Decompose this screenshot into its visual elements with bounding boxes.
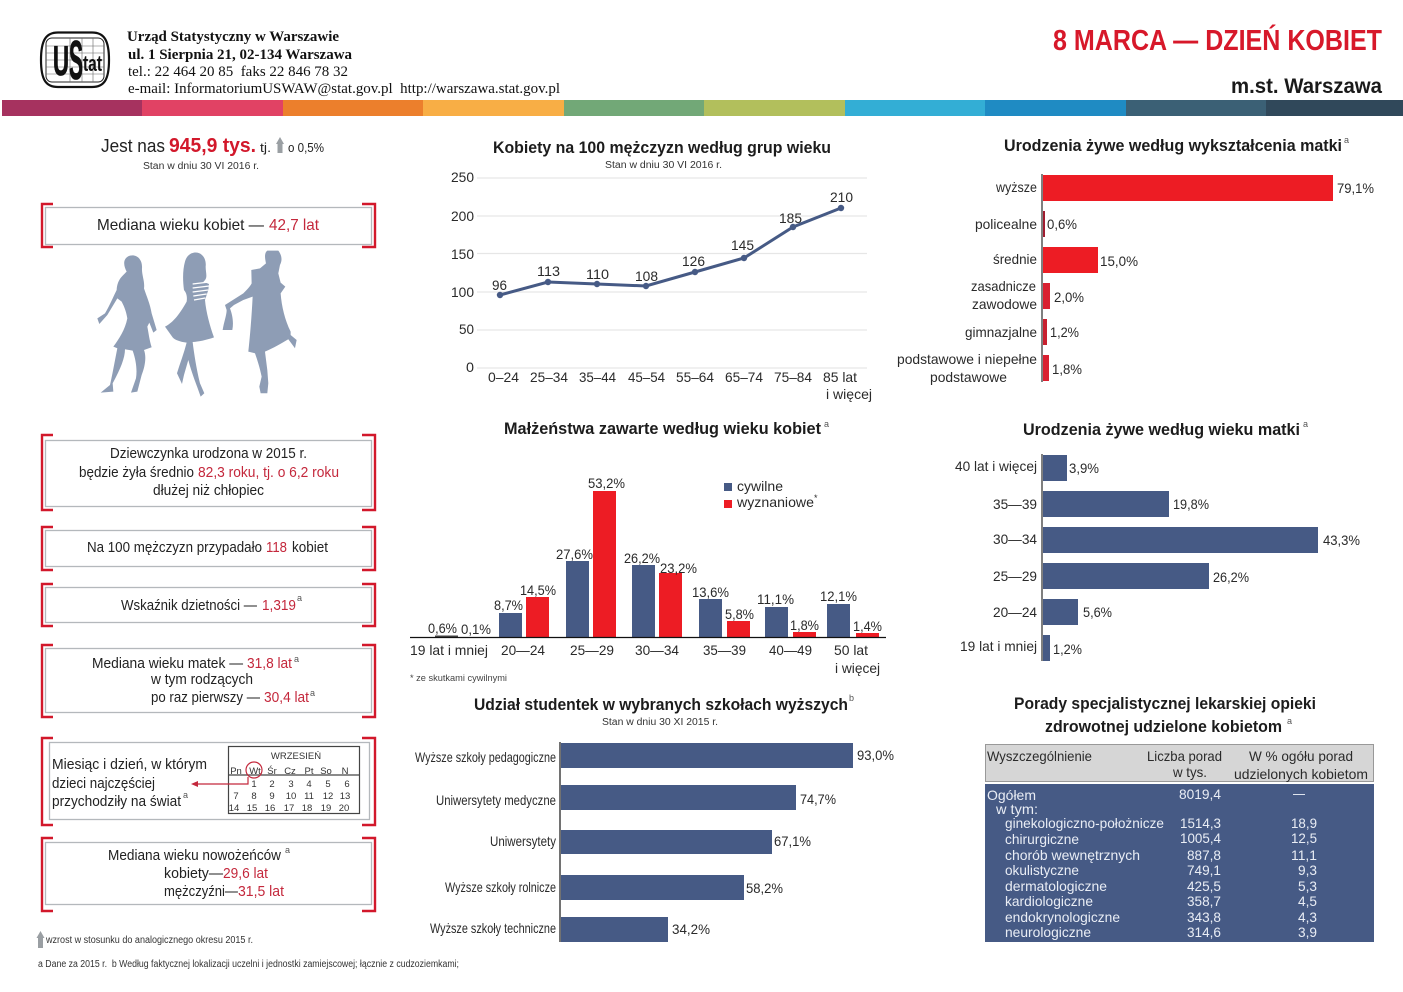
table body: 358,7 — [1187, 893, 1221, 909]
group: 30-34: 23,2% — [660, 560, 697, 576]
group: 40-49: 1,8% — [790, 617, 819, 633]
table body: 3,9 — [1298, 924, 1317, 940]
calendar: September: Pn — [230, 766, 242, 777]
bar chart: births by mother's age — [955, 419, 1360, 661]
bar: wyższe — [995, 175, 1374, 201]
bar: średnie — [993, 247, 1138, 273]
group: 20-24 — [494, 582, 556, 658]
bar: 20-24: 20—24 — [993, 604, 1037, 620]
bar: Wyższe szkoły rolnicze: Wyższe szkoły rolnicze — [445, 879, 556, 895]
panel: median age of newlyweds — [42, 838, 375, 911]
group: 19 lat i mniej: 0,6% — [428, 620, 457, 636]
table body: 8019,4 — [1179, 786, 1221, 802]
panel: fertility rate: a — [297, 593, 302, 603]
panel: population headline: Stan w dniu 30 VI 2016 r. — [143, 161, 259, 172]
institution name and address: tel.: 22 464 20 85 faks 22 846 78 32 — [128, 64, 348, 80]
icon: woman 1 — [97, 255, 157, 393]
panel: median age of mothers: po raz pierwszy — — [151, 690, 260, 706]
legend: wyznaniowe — [736, 494, 814, 510]
line chart: women per 100 men by age group — [451, 138, 872, 402]
panel: median age of mothers: a — [310, 688, 315, 698]
panel: most common birth date: a — [183, 790, 188, 800]
table header: Wyszczególnienie — [987, 748, 1092, 764]
bar: Wyższe szkoły pedagogiczne: Wyższe szkoły pedagogiczne — [415, 749, 556, 765]
chart title: Urodzenia żywe według wieku matki — [1023, 420, 1300, 439]
table body: w tym: — [995, 801, 1038, 817]
panel: population headline — [101, 135, 324, 172]
data labels: 96 — [492, 277, 507, 293]
table body: 9,3 — [1298, 862, 1317, 878]
group: 50 lat i więcej — [820, 588, 882, 676]
group: 50 lat i więcej: i więcej — [835, 660, 880, 676]
table body: 12,5 — [1291, 830, 1317, 846]
bar: zasadnicze zawodowe — [971, 278, 1084, 312]
icon: UStat logo: U — [53, 37, 69, 84]
y axis labels: 0 — [466, 359, 474, 375]
chart title: a — [824, 419, 829, 429]
bar: 35-39: 35—39 — [993, 496, 1037, 512]
group: 40-49: 11,1% — [757, 591, 794, 607]
bar: Wyższe szkoły techniczne: 34,2% — [672, 921, 710, 937]
group: 20-24: 8,7% — [494, 597, 523, 613]
table body: 749,1 — [1187, 862, 1221, 878]
chart subtitle: Stan w dniu 30 VI 2016 r. — [605, 160, 722, 171]
calendar: September — [228, 746, 360, 814]
colour strip — [2, 100, 1403, 116]
panel: life expectancy: dłużej niż chłopiec — [153, 483, 264, 499]
bar: Uniwersytety: Uniwersytety — [490, 833, 556, 849]
institution name and address: ul. 1 Sierpnia 21, 02-134 Warszawa — [128, 47, 353, 63]
table header: udzielonych kobietom — [1234, 766, 1368, 782]
table body: 5,3 — [1298, 878, 1317, 894]
legend: cywilne — [737, 478, 783, 494]
panel: median age of newlyweds: a — [285, 845, 290, 855]
table body: 343,8 — [1187, 909, 1221, 925]
legend: growth arrow — [36, 931, 253, 948]
bar: 20-24 — [993, 599, 1112, 625]
calendar: September: 15 — [247, 803, 257, 814]
table body: 4,5 — [1298, 893, 1317, 909]
table header: Liczba porad — [1147, 748, 1222, 764]
data labels: 210 — [830, 189, 853, 205]
icon: woman 2 — [165, 253, 214, 397]
category labels: 45–54 — [628, 369, 665, 385]
panel: women per 100 men: 118 — [266, 540, 287, 556]
group: 30-34: 26,2% — [624, 550, 660, 566]
table body: 1514,3 — [1180, 815, 1221, 831]
table body: okulistyczne — [1005, 862, 1079, 878]
category labels: 25–34 — [530, 369, 568, 385]
table body: kardiologiczne — [1005, 893, 1093, 909]
bar: 35-39 — [993, 491, 1209, 517]
chart title: b — [849, 693, 854, 703]
bar: Wyższe szkoły rolnicze — [445, 875, 783, 900]
bar: Wyższe szkoły techniczne — [430, 917, 710, 942]
table body: endokrynologiczne — [1005, 909, 1120, 925]
bar: Uniwersytety: 67,1% — [774, 833, 811, 849]
calendar: September: 3 — [288, 779, 294, 790]
bar chart: marriages by age of women — [410, 419, 886, 684]
bar chart: share of female students — [415, 693, 894, 942]
bar chart: births by mother's education — [897, 135, 1374, 385]
group: 25-29: 25—29 — [570, 642, 614, 658]
panel: median age of mothers — [42, 645, 375, 717]
panel: median age of mothers: a — [294, 654, 299, 664]
table header: w tys. — [1172, 764, 1207, 780]
bar: policealne — [975, 211, 1077, 237]
y axis labels: 100 — [451, 284, 474, 300]
bar: Uniwersytety medyczne — [436, 785, 836, 810]
table body: chorób wewnętrznych — [1005, 847, 1140, 863]
panel: most common birth date: przychodziły na świat — [52, 794, 181, 810]
group: 30-34: 30—34 — [635, 642, 679, 658]
calendar: September: 6 — [344, 779, 350, 790]
calendar: September: 10 — [286, 791, 296, 802]
calendar: September: 9 — [269, 791, 275, 802]
calendar: September: 4 — [306, 779, 312, 790]
table body: 1005,4 — [1180, 830, 1221, 846]
data line — [497, 205, 844, 298]
calendar: September: 1 — [251, 779, 257, 790]
panel: median age of newlyweds: Mediana wieku nowożeńców — [108, 848, 281, 864]
calendar: September: 18 — [302, 803, 312, 814]
y axis labels: 250 — [451, 169, 474, 185]
calendar: September: 5 — [325, 779, 331, 790]
group: 20-24: 14,5% — [520, 582, 556, 598]
bar: wyższe: wyższe — [995, 179, 1037, 195]
bar: 40 lat i więcej: 40 lat i więcej — [955, 458, 1037, 474]
chart title: Kobiety na 100 mężczyzn według grup wieku — [493, 138, 831, 157]
calendar: September: 14 — [229, 803, 239, 814]
panel: population headline: Jest nas — [101, 135, 165, 156]
bar: policealne: policealne — [975, 216, 1037, 232]
group: 25-29: 53,2% — [588, 475, 625, 491]
data labels: 108 — [635, 268, 658, 284]
institution name and address: Urząd Statystyczny w Warszawie — [127, 29, 340, 45]
table: specialist medical consultations — [985, 694, 1374, 942]
panel: median age of women: 42,7 lat — [269, 217, 320, 234]
bar: średnie: 15,0% — [1100, 253, 1138, 269]
bar: zasadnicze zawodowe: 2,0% — [1054, 289, 1084, 305]
table body: Ogółem — [987, 787, 1036, 803]
calendar: September: 8 — [251, 791, 257, 802]
bar: Wyższe szkoły pedagogiczne — [415, 743, 894, 768]
bar: zasadnicze zawodowe: zawodowe — [972, 296, 1037, 312]
chart title: Urodzenia żywe według wykształcenia matki — [1004, 136, 1342, 155]
table title: zdrowotnej udzielone kobietom — [1045, 717, 1282, 736]
panel: fertility rate: Wskaźnik dzietności — — [121, 598, 257, 614]
bar: 19 lat i mniej: 19 lat i mniej — [960, 638, 1037, 654]
panel: women per 100 men: kobiet — [292, 540, 328, 556]
chart title: a — [1344, 135, 1349, 145]
data labels: 126 — [682, 253, 705, 269]
panel: population headline: tj. — [260, 141, 271, 155]
bar: Uniwersytety medyczne: Uniwersytety medyczne — [436, 792, 556, 808]
subtitle: region: m.st. Warszawa — [1231, 75, 1382, 98]
table body: 4,3 — [1298, 909, 1317, 925]
group: 25-29: 27,6% — [556, 546, 593, 562]
bar: średnie: średnie — [993, 251, 1037, 267]
bar: 25-29: 26,2% — [1213, 569, 1249, 585]
group: 25-29 — [556, 475, 625, 658]
calendar: September: WRZESIEŃ — [271, 751, 321, 762]
bar: Uniwersytety — [490, 830, 811, 854]
bar: Uniwersytety medyczne: 74,7% — [800, 791, 836, 807]
panel: median age of mothers: Mediana wieku matek — — [92, 656, 243, 672]
bar: Wyższe szkoły rolnicze: 58,2% — [746, 880, 783, 896]
icon: woman 3 — [223, 251, 297, 393]
calendar highlight and arrow — [191, 762, 262, 787]
table body — [985, 784, 1374, 942]
silhouettes of three women — [97, 251, 297, 397]
bar: 30-34: 30—34 — [993, 531, 1037, 547]
panel: median age of mothers: 30,4 lat — [264, 690, 309, 706]
calendar: September: So — [320, 766, 332, 777]
bar: 25-29 — [993, 563, 1249, 589]
group: 35-39: 5,8% — [725, 606, 754, 622]
chart title: a — [1303, 419, 1308, 429]
bar: 40 lat i więcej — [955, 455, 1099, 481]
institution name and address — [127, 29, 560, 97]
table header: W % ogółu porad — [1249, 748, 1353, 764]
panel: population headline: o 0,5% — [288, 141, 324, 155]
y axis labels — [451, 169, 474, 375]
institution name and address: e-mail: InformatoriumUSWAW@stat.gov.pl http://warszawa.stat.gov.pl — [128, 81, 560, 97]
bar: gimnazjalne: gimnazjalne — [965, 324, 1037, 340]
y axis labels: 50 — [459, 321, 474, 337]
panel: life expectancy: Dziewczynka urodzona w 2015 r. — [110, 446, 307, 462]
table body: 887,8 — [1187, 847, 1221, 863]
bar: policealne: 0,6% — [1047, 216, 1077, 232]
table body: ginekologiczno-położnicze — [1005, 815, 1164, 831]
bar: wyższe: 79,1% — [1337, 180, 1374, 196]
category labels: 35–44 — [579, 369, 616, 385]
panel: fertility rate — [42, 584, 375, 626]
calendar: September: 2 — [269, 779, 275, 790]
table body: dermatologiczne — [1005, 878, 1107, 894]
panel: life expectancy: będzie żyła średnio — [79, 465, 194, 481]
calendar: September: 17 — [284, 803, 294, 814]
chart subtitle: Stan w dniu 30 XI 2015 r. — [602, 717, 718, 728]
y axis labels: 150 — [451, 246, 474, 262]
panel: life expectancy — [42, 435, 375, 510]
category labels: 75–84 — [774, 369, 812, 385]
group: 35-39 — [692, 584, 754, 658]
group: 50 lat i więcej: 50 lat — [834, 642, 868, 658]
calendar: September: 13 — [340, 791, 350, 802]
data labels: 145 — [731, 237, 754, 253]
icon: UStat logo — [41, 29, 109, 91]
bar: 19 lat i mniej — [960, 635, 1082, 661]
header: institution — [41, 29, 560, 97]
group: 30-34 — [624, 550, 697, 658]
panel: most common birth date: dzieci najczęściej — [52, 776, 155, 792]
group: 40-49 — [757, 591, 819, 658]
icon: UStat logo: S — [69, 29, 83, 91]
legend: growth arrow: wzrost w stosunku do analogicznego okresu 2015 r. — [45, 935, 253, 946]
panel: fertility rate: 1,319 — [262, 598, 296, 614]
table body: 11,1 — [1291, 847, 1317, 863]
panel: most common birth date: Miesiąc i dzień, w którym — [52, 757, 207, 773]
group: 19 lat i mniej — [410, 620, 491, 658]
panel: median age of women: Mediana wieku kobiet — — [97, 217, 264, 234]
category labels — [488, 369, 872, 402]
calendar: September: 20 — [339, 803, 349, 814]
bar: zasadnicze zawodowe: zasadnicze — [971, 278, 1036, 294]
group: 50 lat i więcej: 1,4% — [853, 618, 882, 634]
table body: 425,5 — [1187, 878, 1221, 894]
bar: Wyższe szkoły pedagogiczne: 93,0% — [857, 747, 894, 763]
panel: life expectancy: 82,3 roku, tj. o 6,2 roku — [198, 465, 339, 481]
table title: a — [1287, 716, 1292, 726]
y axis labels: 200 — [451, 208, 474, 224]
calendar: September: 7 — [233, 791, 239, 802]
data labels: 113 — [537, 263, 560, 279]
data labels — [492, 189, 853, 293]
panel: median age of newlyweds: mężczyźni— — [164, 884, 238, 900]
calendar: September: 11 — [304, 791, 314, 802]
footnotes: a Dane za 2015 r. b Według faktycznej lokalizacji uczelni i jednostki zamiejscowej; łącznie z cudzoziemkami; — [38, 959, 459, 970]
group: 20-24: 20—24 — [501, 642, 545, 658]
panel: median age of mothers: w tym rodzących — [150, 672, 253, 688]
chart note: * ze skutkami cywilnymi — [410, 673, 507, 684]
bar: podstawowe i niepełne podstawowe: podstawowe i niepełne — [897, 351, 1037, 367]
category labels: 65–74 — [725, 369, 763, 385]
panel: women per 100 men: Na 100 mężczyzn przypadało — [87, 540, 262, 556]
chart title: Małżeństwa zawarte według wieku kobiet — [504, 419, 821, 438]
bar: 30-34 — [993, 527, 1360, 553]
table header — [986, 744, 1374, 782]
calendar: September: 16 — [265, 803, 275, 814]
table body: 18,9 — [1291, 815, 1317, 831]
bar: gimnazjalne — [965, 319, 1079, 345]
bar: 19 lat i mniej: 1,2% — [1053, 641, 1082, 657]
panel: median age of women — [42, 204, 375, 247]
calendar: September: Pt — [305, 766, 314, 777]
table body: chirurgiczne — [1005, 831, 1079, 847]
bar: podstawowe i niepełne podstawowe — [897, 351, 1082, 385]
panel: median age of newlyweds: 29,6 lat — [223, 866, 268, 882]
panel: median age of newlyweds: kobiety— — [164, 866, 223, 882]
category labels: 0–24 — [488, 369, 519, 385]
calendar: September: Wt — [249, 766, 261, 777]
bar: Wyższe szkoły techniczne: Wyższe szkoły techniczne — [430, 920, 556, 936]
group: 19 lat i mniej: 0,1% — [461, 621, 491, 637]
bar: podstawowe i niepełne podstawowe: podstawowe — [930, 369, 1007, 385]
legend — [724, 478, 818, 510]
table body: neurologiczne — [1005, 924, 1091, 940]
table body: — — [1293, 785, 1305, 801]
bar: gimnazjalne: 1,2% — [1050, 324, 1079, 340]
data labels: 185 — [779, 210, 802, 226]
panel: median age of mothers: 31,8 lat — [247, 656, 292, 672]
bar: 40 lat i więcej: 3,9% — [1069, 460, 1099, 476]
bar: 30-34: 43,3% — [1323, 532, 1360, 548]
group: 35-39: 13,6% — [692, 584, 729, 600]
group: 35-39: 35—39 — [703, 642, 746, 658]
calendar: September: Cz — [284, 766, 296, 777]
calendar: September: N — [342, 766, 349, 777]
chart title: Udział studentek w wybranych szkołach wyższych — [474, 695, 848, 714]
group: 50 lat i więcej: 12,1% — [820, 588, 857, 604]
group: 19 lat i mniej: 19 lat i mniej — [410, 642, 488, 658]
panel: women per 100 men — [42, 527, 375, 570]
table title: Porady specjalistycznej lekarskiej opieki — [1014, 694, 1316, 713]
group: 40-49: 40—49 — [769, 642, 812, 658]
calendar: September: Śr — [267, 765, 277, 777]
table body: 314,6 — [1187, 924, 1221, 940]
icon: up arrow — [276, 137, 284, 153]
bar: podstawowe i niepełne podstawowe: 1,8% — [1052, 361, 1082, 377]
calendar: September: 19 — [321, 803, 331, 814]
icon: UStat logo: tat — [83, 51, 102, 76]
category labels: 85 lat — [823, 369, 857, 385]
panel: median age of newlyweds: 31,5 lat — [238, 884, 284, 900]
category labels: i więcej — [826, 386, 872, 402]
panel: most common birth date — [42, 738, 375, 825]
category labels: 55–64 — [676, 369, 714, 385]
table title — [1014, 694, 1316, 736]
data labels: 110 — [586, 266, 609, 282]
legend: * — [814, 493, 818, 503]
calendar: September: 12 — [323, 791, 333, 802]
panel: population headline: 945,9 tys. — [169, 135, 256, 157]
bar: 25-29: 25—29 — [993, 568, 1037, 584]
bar: 35-39: 19,8% — [1173, 496, 1209, 512]
bar: 20-24: 5,6% — [1083, 604, 1112, 620]
